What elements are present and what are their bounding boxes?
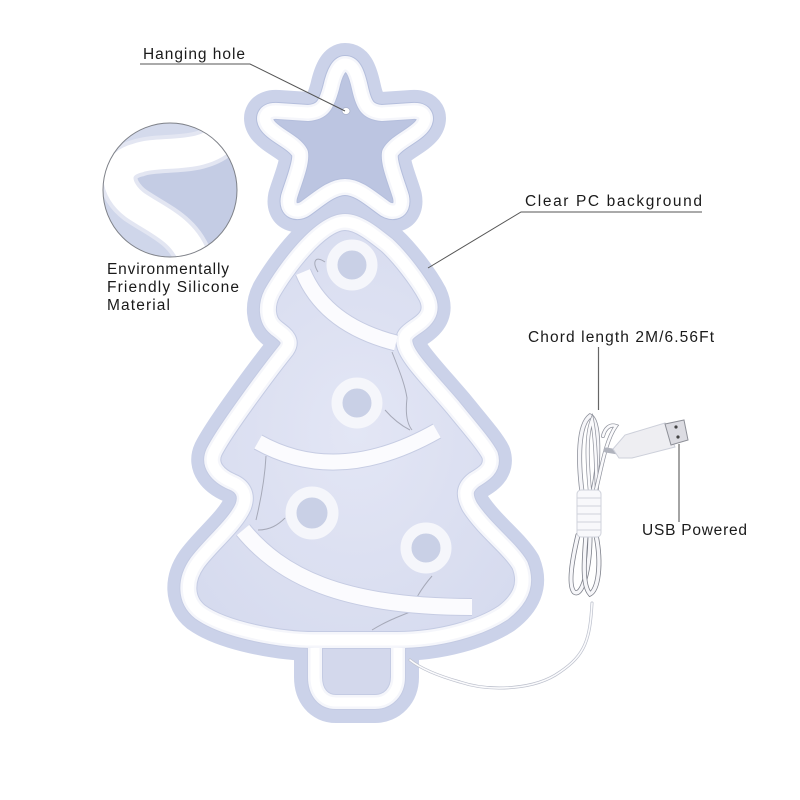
callout: hanging hole	[140, 46, 345, 111]
tree interior	[188, 222, 523, 640]
neon tube: tree outline	[188, 222, 523, 640]
callout: clear PC background	[428, 193, 702, 268]
garland strips	[243, 272, 472, 607]
cable to USB plug	[606, 450, 618, 452]
callout: chord length: Chord length 2M/6.56Ft	[528, 329, 715, 346]
label: silicone material: Material	[107, 297, 170, 314]
product: neon tree light	[188, 64, 523, 702]
inset: silicone material closeup	[100, 120, 237, 262]
USB plug	[613, 420, 688, 458]
label: silicone material: Environmentally	[107, 261, 229, 278]
label: silicone material	[107, 261, 239, 314]
neon tube: star	[265, 64, 425, 211]
upper coil loops	[580, 416, 598, 495]
neon tube: stem	[315, 648, 398, 702]
USB cable	[410, 416, 618, 688]
acrylic backing plate	[188, 64, 523, 702]
hanging hole	[342, 108, 350, 114]
callout: USB powered: USB Powered	[642, 522, 747, 539]
lower coil loops	[571, 535, 590, 593]
ornament rings	[291, 245, 446, 568]
plug body	[613, 423, 675, 458]
callout: clear PC background: Clear PC background	[525, 193, 702, 210]
light plate edge	[123, 124, 199, 143]
long cable to tree	[410, 603, 592, 688]
callout: hanging hole: Hanging hole	[143, 46, 245, 63]
cable wrap	[577, 490, 601, 537]
wires inside tree	[256, 259, 432, 630]
stem interior	[315, 645, 398, 702]
metal connector	[665, 420, 688, 445]
label: silicone material: Friendly Silicone	[107, 279, 239, 296]
silicone tube	[118, 135, 225, 262]
star interior	[265, 64, 425, 211]
callout: USB powered	[642, 444, 747, 539]
